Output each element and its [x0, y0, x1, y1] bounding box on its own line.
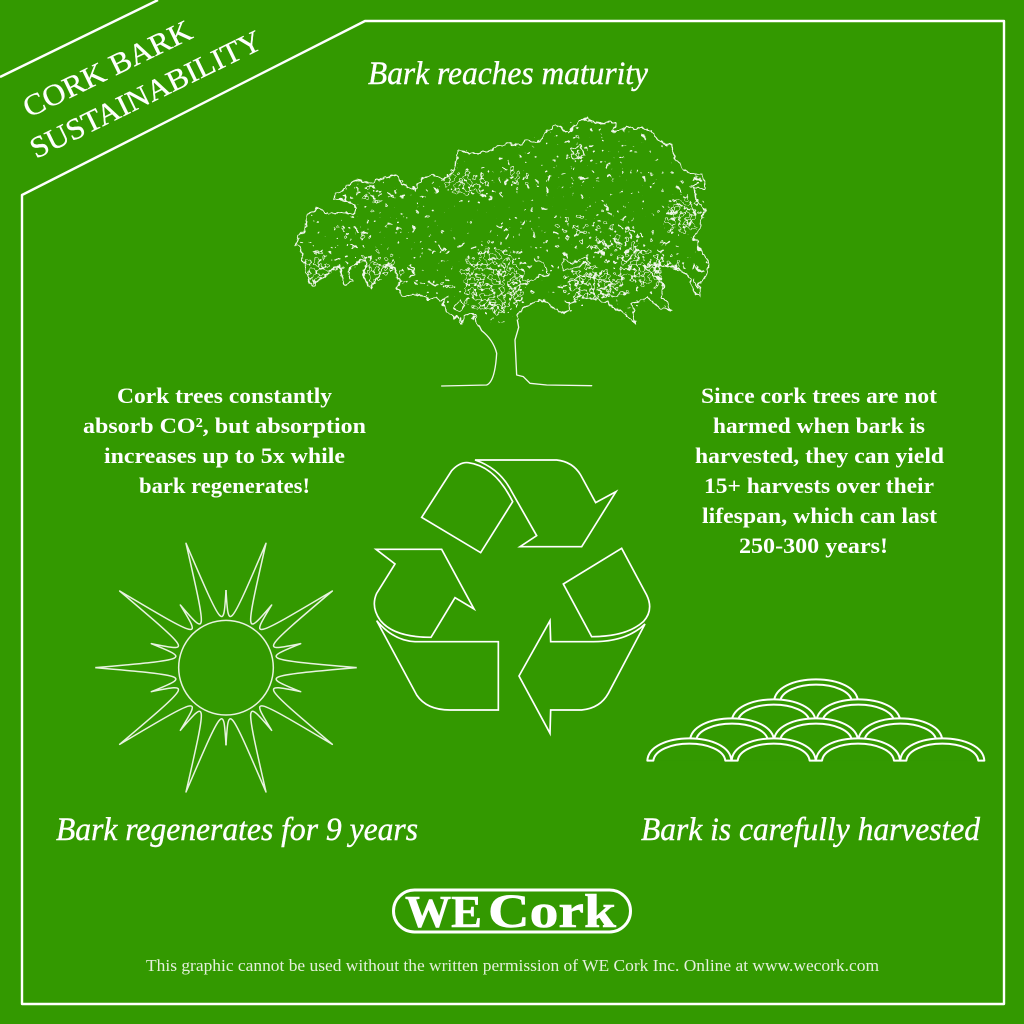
text block: CO2 absorption: Cork trees constantly [117, 383, 332, 408]
logo: WE Cork: WE [405, 886, 482, 937]
text block: CO2 absorption: bark regenerates! [139, 473, 310, 498]
heading: bark reaches maturity: Bark reaches maturity [368, 56, 648, 92]
text block: CO2 absorption [83, 383, 366, 498]
logo: WE Cork: Cork [488, 885, 616, 938]
text block: CO2 absorption: absorb CO², but absorption [83, 413, 366, 438]
text block: CO2 absorption: increases up to 5x while [104, 443, 345, 468]
text block: harvests over lifespan: harmed when bark is [713, 413, 925, 438]
icon: recycling arrows [374, 460, 650, 733]
title banner: CORK BARK [18, 14, 198, 124]
icon: stacked cork bark [647, 679, 984, 761]
title banner: SUSTAINABILITY [25, 24, 267, 165]
text block: harvests over lifespan: lifespan, which can last [702, 503, 938, 528]
text block: harvests over lifespan: 15+ harvests over their [704, 473, 934, 498]
text block: harvests over lifespan: 250-300 years! [739, 533, 888, 558]
icon: cork oak tree [294, 116, 710, 387]
text block: harvests over lifespan: harvested, they can yield [695, 443, 944, 468]
footer note: This graphic cannot be used without the written permission of WE Cork Inc. Online at www.wecork.com [146, 956, 879, 975]
caption: bark regenerates: Bark regenerates for 9 years [56, 812, 418, 848]
icon: sun [95, 543, 357, 792]
caption: bark is harvested: Bark is carefully harvested [641, 812, 980, 848]
trunk [442, 320, 592, 386]
text block: harvests over lifespan [695, 383, 944, 558]
logo: WE Cork [394, 885, 630, 938]
text block: harvests over lifespan: Since cork trees are not [701, 383, 938, 408]
